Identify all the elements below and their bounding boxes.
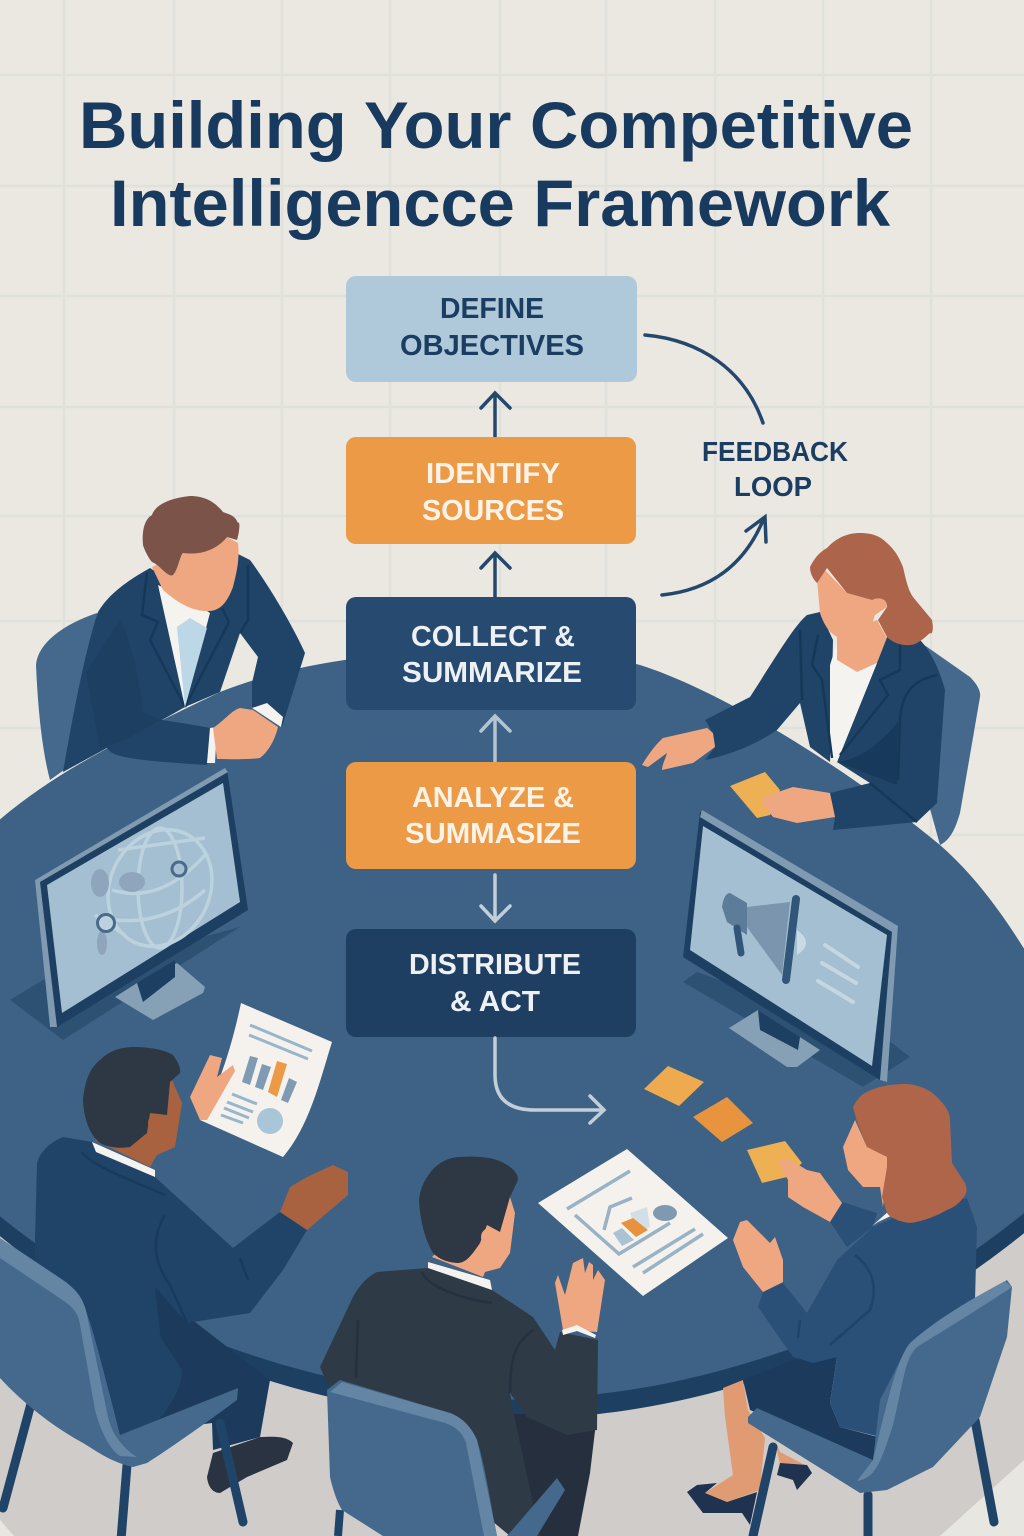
pie <box>257 1108 283 1134</box>
step: collect and summarize: COLLECT & <box>411 621 575 653</box>
monitor: megaphone <box>683 810 910 1087</box>
document: report <box>538 1149 728 1296</box>
arrow: analyze to distribute <box>481 875 510 921</box>
arrow: distribute to table <box>495 1038 604 1123</box>
seat and back <box>0 1240 238 1467</box>
rim <box>0 1238 137 1457</box>
person: top left man <box>36 496 305 780</box>
title <box>79 88 913 240</box>
trousers <box>120 1280 270 1450</box>
land <box>91 869 109 897</box>
pointing hand <box>778 1158 842 1222</box>
hair <box>83 1047 180 1148</box>
torso and near arm <box>758 1198 977 1437</box>
screen <box>690 826 887 1066</box>
skin neck <box>837 620 888 672</box>
seat and back <box>748 1280 1012 1493</box>
jacket: arm and left front <box>705 612 833 762</box>
arrow: collect to identify <box>481 553 510 597</box>
person: bottom right woman <box>687 1084 977 1525</box>
chair: bottom right <box>748 1280 1012 1536</box>
jacket details <box>800 630 937 822</box>
globe lines <box>89 812 231 964</box>
back shoe <box>777 1463 812 1490</box>
rim <box>700 810 898 1082</box>
far arm <box>830 1202 877 1247</box>
rim <box>857 1281 1012 1481</box>
ear <box>871 591 889 609</box>
sticky notes <box>644 1066 802 1183</box>
tie <box>177 618 207 707</box>
map markers <box>172 862 186 876</box>
front shoe <box>687 1483 757 1525</box>
stand neck <box>758 1010 800 1050</box>
arm seam <box>798 1255 874 1345</box>
table <box>0 652 1024 1420</box>
step: collect and summarize <box>346 597 636 710</box>
jacket shadow <box>837 722 898 785</box>
arrow: identify to define <box>481 393 510 437</box>
chair back <box>327 1380 497 1536</box>
shoe <box>207 1437 293 1493</box>
step: define objectives <box>346 276 637 382</box>
sticky note <box>730 772 780 818</box>
frame <box>35 769 248 1027</box>
skirt <box>743 1357 878 1462</box>
raised hand <box>555 1258 605 1332</box>
stand base <box>729 1010 820 1067</box>
arm seam <box>82 1152 248 1323</box>
shadow <box>683 972 910 1087</box>
bars <box>242 1056 297 1103</box>
person: bottom center man <box>320 1157 605 1536</box>
arrow: feedback loop top <box>645 335 763 423</box>
shadow <box>10 927 240 1040</box>
megaphone bar <box>786 899 796 980</box>
face <box>152 537 239 611</box>
shirt <box>158 585 210 707</box>
step: distribute and act: & ACT <box>450 986 540 1018</box>
shirt <box>830 643 877 762</box>
feedback loop label <box>702 436 848 502</box>
left hand <box>642 728 715 770</box>
document: bar chart <box>200 1003 332 1157</box>
arrow: analyze to collect <box>481 716 510 762</box>
face <box>817 570 887 639</box>
step: define objectives: DEFINE <box>440 293 544 325</box>
rim <box>330 1382 497 1536</box>
hair <box>853 1084 966 1223</box>
chair: bottom left <box>0 1238 243 1536</box>
feedback loop label: LOOP <box>734 471 812 502</box>
megaphone cone <box>747 902 790 975</box>
arm <box>507 1478 565 1536</box>
step: analyze and summasize <box>346 762 636 869</box>
jacket: right front and sleeve <box>830 635 945 830</box>
hair <box>810 533 933 645</box>
speaker glow <box>797 930 806 955</box>
suit jacket <box>35 1137 307 1435</box>
collar <box>428 1262 492 1290</box>
arrow: feedback loop bottom <box>662 517 766 595</box>
step: identify sources <box>346 437 636 544</box>
back leg <box>775 1440 805 1465</box>
person: top right woman <box>642 533 980 845</box>
monitor: globe <box>10 768 248 1040</box>
lapel lines <box>142 565 248 707</box>
chair back <box>900 642 980 845</box>
clasped hands <box>213 708 278 759</box>
step: analyze and summasize: ANALYZE & <box>412 782 574 814</box>
megaphone back <box>722 893 747 935</box>
collar <box>92 1142 155 1177</box>
suit jacket <box>63 554 305 772</box>
screen <box>47 783 240 1013</box>
legs <box>3 1400 243 1536</box>
step: distribute and act: DISTRIBUTE <box>409 949 581 981</box>
ear <box>481 1228 499 1246</box>
stand neck <box>137 960 175 1002</box>
hand on table <box>280 1165 348 1230</box>
title: Intelligencce Framework <box>110 166 890 240</box>
step: identify sources: SOURCES <box>422 495 564 527</box>
hair <box>419 1157 518 1263</box>
jacket shadow <box>86 620 160 748</box>
right hand <box>762 787 835 823</box>
collar <box>872 1210 893 1226</box>
chair: bottom center <box>327 1380 565 1536</box>
cuffs <box>207 703 283 763</box>
step: define objectives: OBJECTIVES <box>400 330 584 362</box>
face <box>843 1120 890 1207</box>
seams <box>356 1272 533 1393</box>
legs <box>753 1420 994 1536</box>
rim <box>35 768 228 1027</box>
hair <box>143 496 239 575</box>
feedback loop label: FEEDBACK <box>702 436 848 467</box>
person: bottom left man <box>35 1047 348 1493</box>
step: analyze and summasize: SUMMASIZE <box>405 818 581 850</box>
neck and head skin <box>95 1080 182 1167</box>
ear <box>148 1114 166 1132</box>
chair back <box>36 613 110 780</box>
frame <box>683 812 898 1080</box>
title: Building Your Competitive <box>79 88 913 162</box>
text lines <box>818 945 858 1002</box>
megaphone handle <box>737 928 741 953</box>
trousers <box>510 1414 597 1536</box>
cuff <box>562 1325 596 1338</box>
lower hand <box>733 1220 783 1292</box>
front leg <box>705 1380 765 1502</box>
suit jacket <box>320 1268 598 1536</box>
step: distribute and act <box>346 929 636 1037</box>
step: collect and summarize: SUMMARIZE <box>402 657 582 689</box>
hand holding document <box>190 1055 235 1120</box>
step: identify sources: IDENTIFY <box>426 458 560 490</box>
stand base <box>115 963 205 1020</box>
neck and head skin <box>432 1197 515 1277</box>
